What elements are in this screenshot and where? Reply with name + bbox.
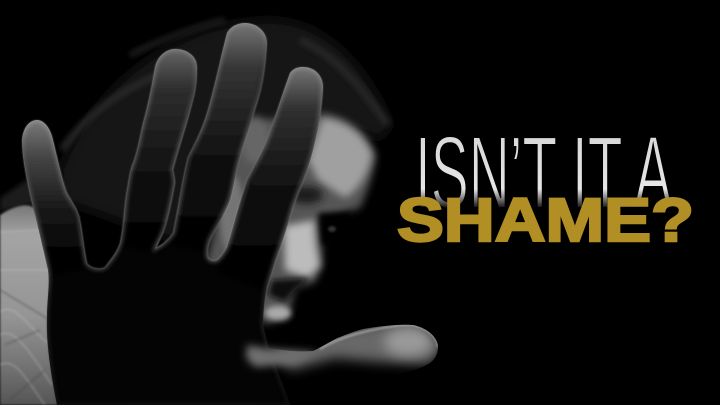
hair	[0, 20, 392, 250]
thumb	[270, 324, 438, 376]
lit heel of palm	[246, 345, 318, 367]
finger shading	[22, 15, 323, 405]
rim light	[22, 23, 323, 405]
hand	[22, 15, 323, 405]
inner rim glow	[22, 23, 323, 405]
palm and fingers	[22, 23, 323, 405]
sweater	[0, 205, 70, 405]
face	[205, 113, 376, 324]
title line: SHAME?: SHAME?	[397, 186, 694, 254]
